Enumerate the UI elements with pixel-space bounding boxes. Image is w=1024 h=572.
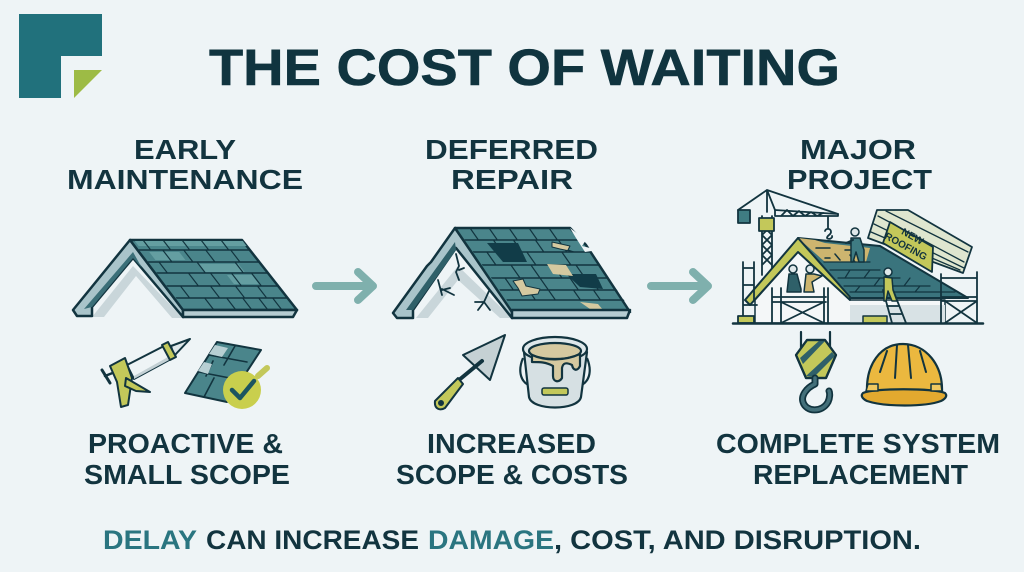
heading: early maintenance: EARLY [134,134,236,165]
footer statement: CAN INCREASE [206,525,419,555]
footer statement: DELAY [103,525,197,555]
crane [738,190,838,275]
roofing bundle [868,210,972,273]
icon: shingle with check [185,342,267,409]
illustration: damaged roof [393,228,630,318]
icon: caulk gun [102,339,190,407]
heading: early maintenance [67,134,303,195]
heading: deferred repair: REPAIR [451,164,573,195]
caption: complete system replacement: COMPLETE SYSTEM [716,428,1000,459]
roof deck and shingles [798,238,968,298]
icon: paint bucket [520,337,590,408]
icon: crane hook [796,332,836,410]
panel: major project [716,134,1000,490]
workers [787,228,897,301]
icon: trowel [435,335,505,409]
caption: increased scope and costs [396,428,628,490]
caption: proactive and small scope: SMALL SCOPE [84,459,290,490]
footer statement: , COST, AND DISRUPTION. [554,525,921,555]
heading: major project: MAJOR [800,134,916,165]
heading: major project: PROJECT [787,164,932,195]
caption: proactive and small scope: PROACTIVE & [88,428,283,459]
materials [863,316,887,323]
illustration: construction scene [733,190,983,324]
arrow: deferred to major [651,272,708,300]
panel: deferred repair [393,134,630,490]
roofing bundle: ROOFING [882,231,929,263]
ladder [883,290,906,323]
footer statement [103,525,921,555]
caption: complete system replacement: REPLACEMENT [753,459,968,490]
house wall [755,252,945,323]
ground line [733,322,983,325]
roofing bundle: NEW [899,227,926,248]
caption: proactive and small scope [84,428,290,490]
heading: early maintenance: MAINTENANCE [67,164,303,195]
icon: logo [19,14,102,98]
caption: increased scope and costs: INCREASED [427,428,596,459]
panel: early maintenance [67,134,303,490]
scaffolds [738,262,977,323]
heading: deferred repair: DEFERRED [425,134,598,165]
heading: major project [787,134,932,195]
icon: hard hat [862,344,946,406]
footer statement: DAMAGE [428,525,554,555]
caption: increased scope and costs: SCOPE & COSTS [396,459,628,490]
caption: complete system replacement [716,428,1000,490]
illustration: intact roof [73,240,297,318]
arrow: early to deferred [316,272,373,300]
heading: deferred repair [425,134,598,195]
title: THE COST OF WAITING [209,39,840,96]
